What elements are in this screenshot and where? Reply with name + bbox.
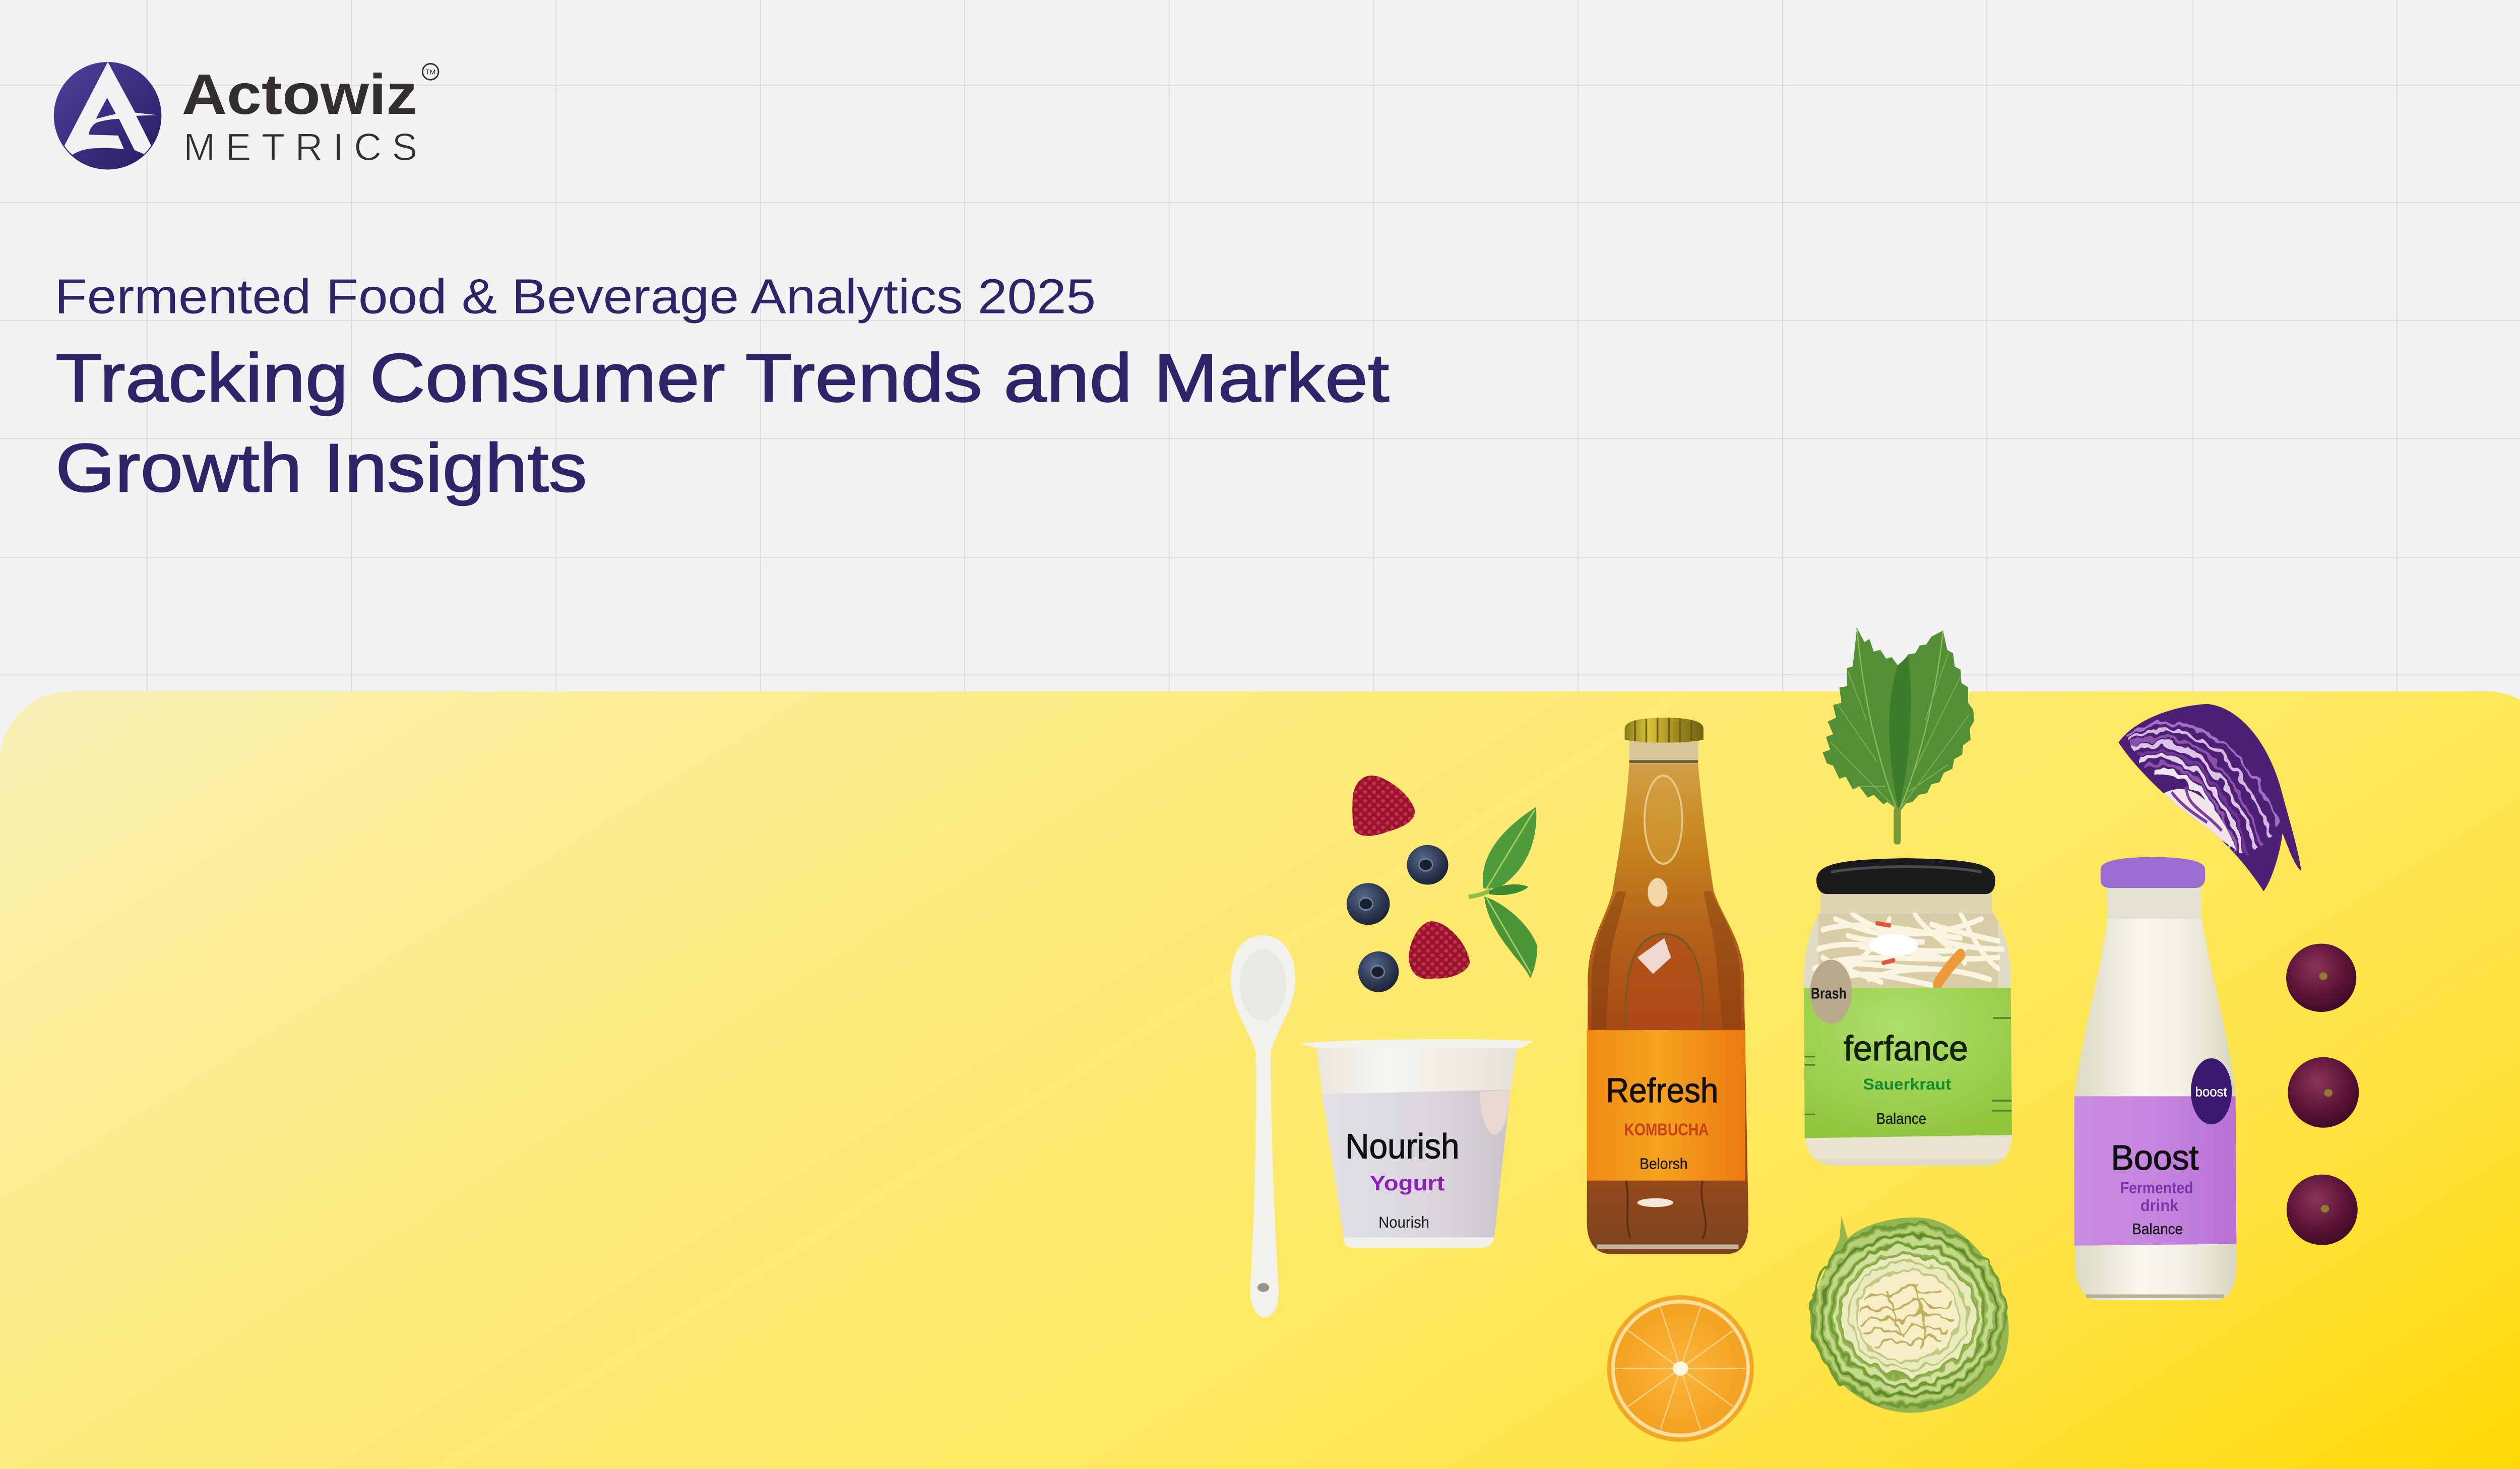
icon: milk kefir bottle xyxy=(2074,857,2236,1300)
icon: green cabbage half xyxy=(1810,1217,2009,1413)
logo: Actowiz Metrics xyxy=(54,62,438,169)
icon: raspberries and blueberries xyxy=(1347,776,1470,992)
icon: mint leaves xyxy=(1469,807,1537,978)
milk bottle brand name: Boost xyxy=(2111,1138,2199,1177)
icon: plum top xyxy=(2286,943,2356,1012)
milk bottle product name: Fermented xyxy=(2120,1179,2193,1197)
icon: yogurt cup xyxy=(1300,1039,1534,1248)
jar sticker text: Brash xyxy=(1811,985,1847,1002)
logo wordmark: METRICS: METRICS xyxy=(183,126,417,169)
milk bottle small brand: Balance xyxy=(2132,1220,2183,1238)
jar brand name: ferfance xyxy=(1844,1029,1968,1068)
yogurt brand name: Nourish xyxy=(1345,1126,1460,1166)
title xyxy=(55,340,1390,506)
title: Tracking Consumer Trends and Market xyxy=(55,340,1390,416)
jar small brand: Balance xyxy=(1876,1110,1926,1127)
trademark symbol: TM xyxy=(425,69,435,77)
subtitle: Fermented Food & Beverage Analytics 2025 xyxy=(54,269,1096,324)
milk bottle product name xyxy=(2120,1179,2193,1215)
icon: kombucha bottle xyxy=(1587,718,1748,1254)
icon: green leaf xyxy=(1822,628,1974,845)
icon: logo badge with letter A xyxy=(54,62,161,169)
bottle small brand: Belorsh xyxy=(1640,1155,1688,1173)
icon: spoon xyxy=(1231,935,1295,1317)
icon: plum middle xyxy=(2288,1057,2359,1128)
jar product name: Sauerkraut xyxy=(1863,1075,1951,1093)
trademark symbol xyxy=(422,63,438,80)
bottle brand name: Refresh xyxy=(1606,1071,1718,1110)
bottle badge text: boost xyxy=(2195,1085,2227,1100)
bottle product name: KOMBUCHA xyxy=(1624,1120,1709,1139)
panel: yellow gradient background xyxy=(0,691,2520,1469)
milk bottle product name: drink xyxy=(2140,1196,2179,1215)
icon: sauerkraut jar xyxy=(1804,858,2013,1166)
title: Growth Insights xyxy=(55,429,587,506)
icon: orange slice xyxy=(1607,1295,1754,1442)
yogurt product name: Yogurt xyxy=(1370,1171,1445,1195)
logo wordmark: Actowiz: Actowiz xyxy=(182,62,417,126)
icon: plum bottom xyxy=(2287,1175,2358,1245)
icon: red cabbage wedge xyxy=(2118,704,2301,891)
yogurt small brand: Nourish xyxy=(1378,1213,1429,1231)
